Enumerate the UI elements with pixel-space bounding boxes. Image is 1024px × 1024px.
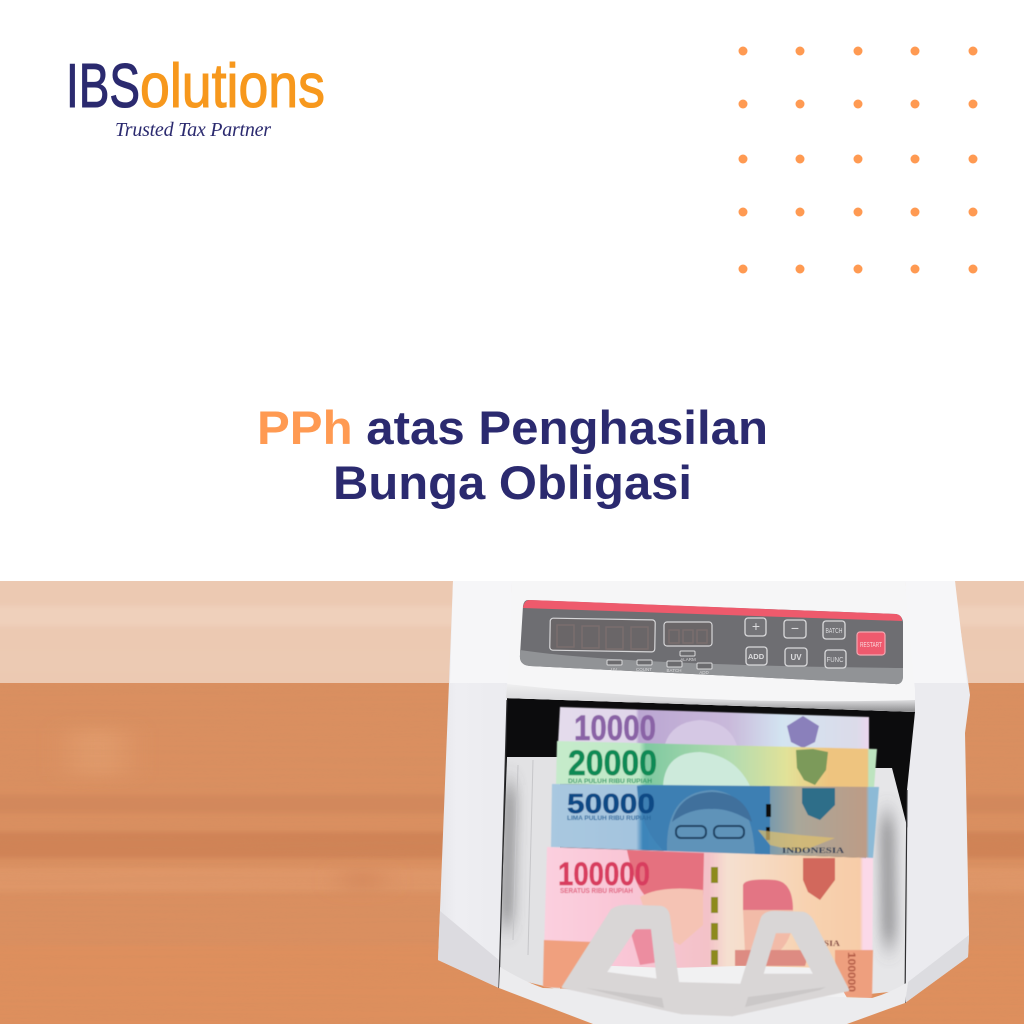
tray inner cover behind stand	[575, 965, 850, 1003]
keypad buttons	[745, 618, 846, 668]
display: batch counter	[664, 622, 712, 646]
title: PPh atas Penghasilan	[257, 401, 768, 454]
slot interior	[499, 698, 915, 995]
security thread	[711, 867, 718, 965]
portrait with glasses	[667, 790, 755, 855]
button labels: UV	[790, 653, 802, 662]
display digits	[557, 625, 707, 649]
left lower facet	[438, 911, 500, 988]
tray front lip	[499, 967, 908, 1024]
indicator lamps	[607, 651, 712, 669]
upper side lightening	[450, 581, 967, 683]
button labels	[748, 618, 844, 664]
indicator labels: ALARM	[680, 657, 696, 662]
indicator labels: COUNT	[636, 667, 652, 672]
button labels: FUNC	[826, 657, 844, 664]
restart button	[857, 632, 885, 655]
banknote: 10000	[558, 707, 869, 750]
button labels: −	[791, 620, 799, 636]
logo: IBSolutions: olutions	[140, 52, 325, 121]
top cover	[506, 581, 915, 712]
banknote: 50000: 50000	[567, 788, 655, 819]
banknote: 100000: 100000	[845, 952, 857, 992]
button labels: BATCH	[826, 628, 842, 635]
banknote: 100000: SERATUS RIBU RUPIAH	[560, 888, 633, 895]
side panel seams	[499, 700, 907, 1003]
button labels: ADD	[748, 652, 765, 661]
slot right inner wall	[860, 768, 908, 995]
garuda emblem	[803, 858, 835, 900]
right lower facet	[905, 935, 969, 1003]
slot left inner wall	[499, 757, 560, 990]
portrait: right figure	[743, 880, 793, 910]
banknote: 50000: INDONESIA	[782, 846, 844, 855]
machine backing silhouette	[506, 690, 918, 800]
title: Bunga Obligasi	[333, 456, 692, 509]
display: main counter	[550, 618, 655, 652]
indicator labels: UV	[611, 667, 617, 672]
button labels: +	[752, 618, 760, 634]
banknote: 20000: 20000	[568, 744, 657, 783]
banknote: 100000: NESIA	[810, 939, 840, 948]
decorative dot grid	[738, 46, 978, 274]
banknote: 100000	[543, 847, 873, 998]
logo: IBSolutions: IBS	[66, 52, 140, 121]
bill stand: AA guides	[563, 906, 848, 1015]
wooden table photo background	[0, 581, 1024, 1024]
banknote: 20000: DUA PULUH RIBU RUPIAH	[568, 778, 652, 785]
banknote: 50000: LIMA PULUH RIBU RUPIAH	[567, 816, 651, 822]
banknote: 20000	[556, 741, 877, 788]
logo: IBSolutions	[66, 52, 325, 141]
banknote: 10000: 10000	[574, 709, 656, 748]
restart button: RESTART	[860, 640, 882, 649]
banknotes	[543, 707, 879, 998]
banknote: 100000: 100000	[558, 856, 650, 892]
machine right side panel	[905, 581, 970, 1003]
portrait: left figure	[627, 850, 704, 900]
indicator labels	[611, 657, 709, 675]
control panel	[520, 600, 903, 684]
banknote: 50000	[551, 784, 879, 858]
indicator labels: ADD	[699, 670, 709, 675]
cover under-lip shading	[506, 684, 915, 712]
title	[257, 401, 768, 509]
logo: IBSolutions: Trusted Tax Partner	[115, 119, 271, 141]
machine left side panel	[438, 581, 512, 988]
indicator labels: BATCH	[667, 668, 681, 673]
money counting machine	[438, 581, 970, 1024]
